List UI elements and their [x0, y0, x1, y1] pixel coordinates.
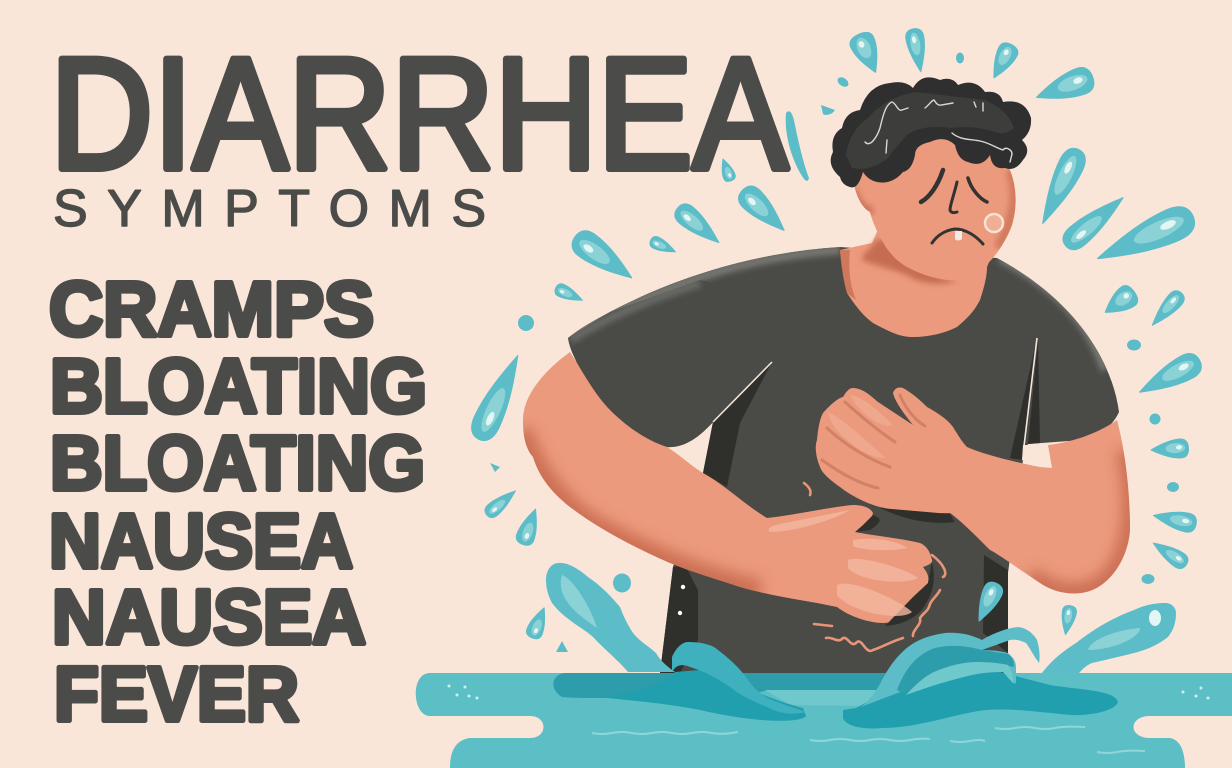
pool dark lower body right — [843, 672, 1118, 728]
right arm shading — [1030, 450, 1132, 592]
stomach pain squiggles — [804, 483, 945, 651]
white crease right sleeve — [1024, 338, 1037, 446]
flying water drops — [466, 27, 1206, 652]
splash left highlight — [561, 575, 597, 628]
pool dots — [448, 684, 1210, 700]
splash small drop — [613, 574, 631, 592]
neck edge shadow — [840, 250, 856, 300]
symptom list: NAUSEA — [49, 498, 353, 584]
lower hand knuckle highlights — [769, 510, 918, 616]
person — [520, 77, 1132, 673]
upper hand highlights — [828, 395, 893, 458]
head shading — [853, 170, 1014, 248]
symptom list: CRAMPS — [49, 266, 374, 352]
neck chin shadow — [862, 238, 958, 284]
shirt dots — [681, 585, 685, 589]
title: Diarrhea: DIARRHEA — [50, 24, 788, 202]
ripple lines — [592, 727, 1145, 753]
wave crest left — [672, 642, 806, 714]
left arm shading — [520, 430, 760, 592]
neck — [840, 225, 1000, 337]
water pool — [416, 673, 1232, 768]
shirt body — [568, 247, 1119, 673]
shoulder grain highlight — [568, 250, 1105, 370]
symptom list: BLOATING — [50, 344, 427, 430]
sleeve grain highlight — [570, 283, 700, 340]
splash left — [546, 563, 675, 672]
cheek swirl — [985, 214, 1003, 232]
hair lighter inner — [846, 92, 1014, 169]
sleeve white crease — [713, 362, 772, 422]
right arm and hand — [816, 388, 1130, 593]
wave crest right outer — [861, 627, 1040, 707]
face: sad eyes, nose, mouth — [921, 170, 987, 244]
cream gap under right sleeve — [1022, 445, 1052, 468]
hair — [831, 77, 1031, 187]
symptom list — [49, 266, 427, 738]
pool darker band left — [553, 673, 890, 700]
drop on shirt — [970, 579, 1006, 626]
splash right highlight — [1088, 628, 1140, 650]
subtitle: Symptoms: SYMPTOMS — [53, 180, 486, 238]
symptom list: FEVER — [54, 652, 299, 738]
pool lighter centre — [765, 690, 880, 706]
symptom list: BLOATING — [50, 420, 425, 506]
shadow under hands — [856, 508, 955, 532]
pool dark lower body left — [600, 670, 806, 721]
tooth — [955, 231, 962, 240]
left sleeve over arm — [568, 280, 790, 447]
head — [853, 130, 1016, 280]
shirt dark side panels — [703, 362, 772, 487]
left arm — [523, 352, 932, 623]
hair highlights — [865, 100, 1012, 162]
wave crest right inner dark — [897, 646, 1014, 695]
splash right — [1042, 603, 1176, 673]
symptom list: NAUSEA — [52, 574, 366, 660]
upper hand finger lines — [822, 395, 925, 488]
wave crest right light — [906, 662, 1013, 695]
